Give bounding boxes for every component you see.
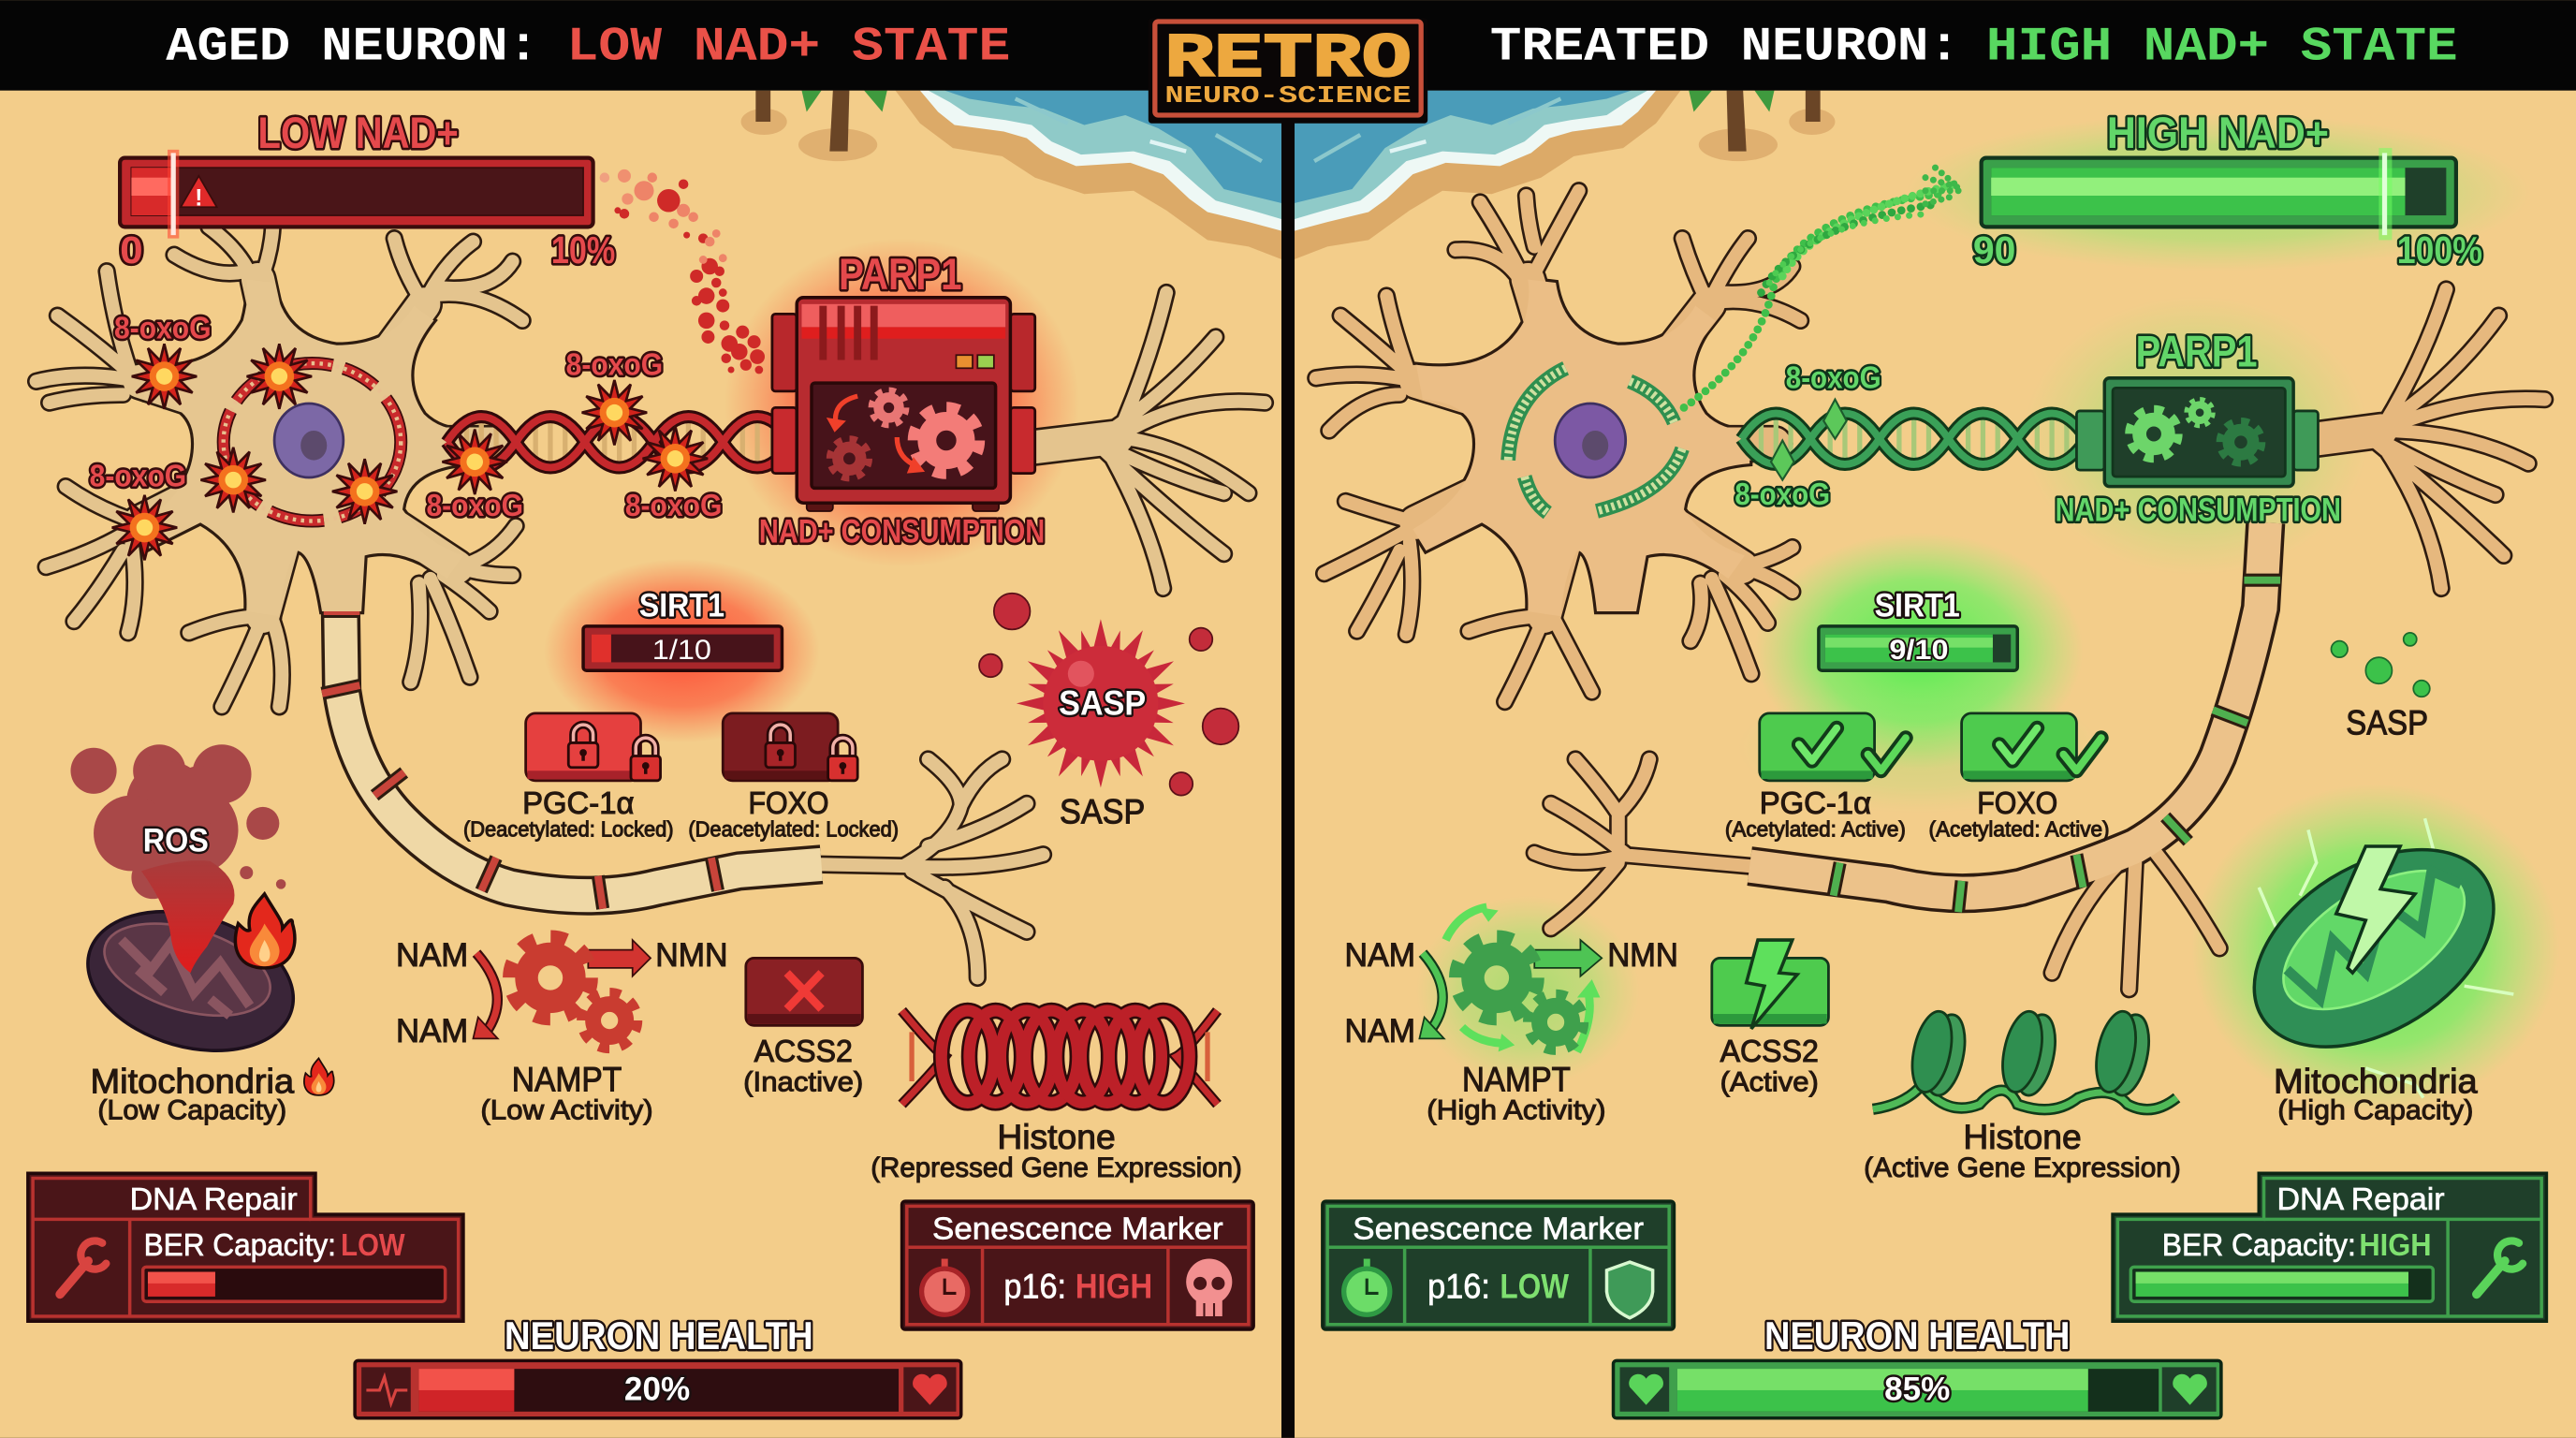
panel: DNA repair high: [2113, 1173, 2546, 1321]
logo: Retro Neuro-Science: RETRO: [1164, 24, 1412, 95]
label: PGC-1a acetylated: [1725, 786, 1906, 841]
panel: senescence marker low: p16:: [1427, 1268, 1490, 1306]
diagram: NAMPT low activity: NMN: [655, 937, 728, 974]
label: mitochondria high capacity: [2274, 1062, 2478, 1125]
glow: mitochondria green: [2191, 784, 2559, 1112]
label: NAD+ consumption: NAD+ CONSUMPTION: [2056, 492, 2341, 529]
icon: FOXO locked: [723, 713, 857, 781]
label: histone active: Histone: [1963, 1118, 2082, 1156]
panel: DNA repair high: BER Capacity:: [2162, 1228, 2356, 1263]
icon: ACSS2 inactive: [746, 958, 862, 1025]
icon: heartbeat: [366, 1377, 407, 1403]
glow: PARP1 red: [724, 239, 1079, 567]
panel: aged neuron: [28, 109, 1265, 1418]
label: FOXO acetylated: [1928, 786, 2110, 841]
gauge scale: 0 to 10%: 10%: [551, 228, 615, 271]
labels: 8-oxoG damage: 8-oxoG: [566, 347, 663, 382]
neuron: aged: [37, 227, 1265, 977]
label: FOXO deacetylated: [688, 786, 899, 841]
nucleus: [274, 404, 344, 477]
icon: skull: [1186, 1259, 1232, 1316]
label: neuron health: NEURON HEALTH: [505, 1313, 813, 1357]
icon: warning triangle: !: [195, 186, 202, 212]
glow: NAMPT green: [1416, 896, 1640, 1086]
DNA damage bursts: [112, 344, 708, 560]
DNA ring: intact, around nucleus: [1508, 368, 1682, 513]
icon: energized mitochondrion: [2219, 809, 2529, 1098]
gauge scale: 90 to 100%: [1973, 228, 2482, 271]
panel: senescence marker high: HIGH: [1076, 1268, 1152, 1306]
panel: DNA repair low: DNA Repair: [130, 1182, 298, 1217]
icon: clock: [1344, 1259, 1390, 1314]
glow: SIRT1 red: [544, 559, 820, 742]
label: NAD+ consumption: NAD+ CONSUMPTION: [759, 513, 1045, 550]
gauge: NAD+ high: [1982, 148, 2456, 240]
glow: checks soft green: [1738, 682, 2100, 814]
header bar: [0, 0, 2576, 91]
diagram: NAMPT high activity: NAMPT: [1462, 1061, 1571, 1099]
glow: PARP1 green: [2024, 296, 2369, 575]
panel: senescence marker low: Senescence Marker: [1353, 1211, 1644, 1246]
meter: SIRT1 9/10: [1819, 626, 2017, 670]
label: histone active: [1864, 1118, 2181, 1183]
panel: treated neuron: [1316, 109, 2559, 1418]
gauge: NAD+ low: [120, 150, 593, 239]
icon: PGC-1a locked: [526, 713, 661, 781]
label: mitochondria low capacity: (Low Capacity): [97, 1094, 286, 1125]
label: histone repressed: (Repressed Gene Expression): [871, 1152, 1242, 1183]
label: SIRT1: SIRT1: [639, 587, 724, 624]
nucleus: [1555, 404, 1626, 477]
icon: wrench: [60, 1240, 106, 1294]
panel: DNA repair low: [28, 1173, 463, 1321]
diagram: NAMPT high activity: NMN: [1607, 937, 1678, 974]
icon: heart right: [2173, 1374, 2207, 1405]
label: PGC-1a deacetylated: [463, 786, 674, 841]
title: aged neuron: LOW NAD+ STATE: [567, 21, 1010, 74]
panel: senescence marker high: p16:: [1003, 1268, 1066, 1306]
gauge scale: 90 to 100%: 90: [1973, 228, 2016, 271]
DNA helix: damaged: [446, 417, 792, 467]
labels: 8-oxoG damage: [90, 312, 722, 523]
diagram: NAMPT high activity: NAM: [1345, 937, 1415, 974]
diagram: NAMPT high activity: [1345, 907, 1678, 1125]
label: PGC-1a acetylated: PGC-1α: [1760, 786, 1871, 821]
panel: senescence marker low: [1323, 1201, 1674, 1329]
health bar: 85%: [1614, 1360, 2221, 1418]
panel: DNA repair low: LOW: [341, 1228, 405, 1263]
meter: SIRT1 9/10: 9/10: [1889, 635, 1949, 666]
label: PGC-1a deacetylated: PGC-1α: [522, 786, 634, 821]
logo: Retro Neuro-Science: NEURO-SCIENCE: [1164, 81, 1412, 110]
panel: DNA repair low: BER Capacity:: [144, 1228, 336, 1263]
labels: 8-oxoG minimal: 8-oxoG: [1734, 477, 1830, 512]
panel: DNA repair high: HIGH: [2359, 1228, 2432, 1263]
label: histone repressed: Histone: [997, 1118, 1116, 1156]
icon: FOXO active: [1962, 713, 2101, 781]
glow: SIRT1 green: [1754, 533, 2083, 770]
icon: clock: [922, 1259, 968, 1314]
icon: SASP small particles: [2331, 633, 2430, 697]
meter: SIRT1 1/10: 1/10: [652, 635, 711, 666]
icon: ROS smoke cloud: ROS: [143, 822, 209, 858]
panel: senescence marker low: LOW: [1500, 1268, 1569, 1306]
icon: SASP virus: [979, 594, 1238, 796]
label: PARP1: PARP1: [2136, 328, 2258, 377]
title: treated neuron: [1490, 21, 2458, 74]
labels: 8-oxoG damage: 8-oxoG: [625, 489, 722, 523]
diagram: NAMPT low activity: (Low Activity): [480, 1094, 653, 1125]
icon: wrench: [2477, 1240, 2523, 1294]
label: SASP: SASP: [2346, 704, 2428, 742]
icon: damaged mitochondrion: [71, 888, 310, 1073]
icon: heart: [913, 1374, 947, 1405]
neuron: treated: [1316, 191, 2545, 990]
label: FOXO deacetylated: FOXO: [748, 786, 828, 821]
title: aged neuron: [166, 21, 1010, 74]
icon: histone open nucleosomes: [1873, 1007, 2177, 1109]
label: PGC-1a acetylated: (Acetylated: Active): [1725, 816, 1906, 841]
meter: SIRT1 1/10: [583, 626, 782, 670]
panel: senescence marker high: Senescence Marker: [932, 1211, 1223, 1246]
label: SASP: SASP: [1060, 792, 1145, 830]
label: mitochondria high capacity: (High Capacity): [2277, 1094, 2473, 1125]
title: treated neuron: TREATED NEURON:: [1490, 21, 1960, 74]
diagram: NAMPT high activity: (High Activity): [1427, 1094, 1606, 1125]
icon: PGC-1a active: [1760, 713, 1906, 781]
glow: NAD+ gauge green: [1906, 113, 2530, 271]
health bar: 20%: [355, 1360, 961, 1418]
arrow: NAD+ particles rising to gauge: [1684, 168, 1965, 407]
label: FOXO acetylated: (Acetylated: Active): [1928, 816, 2110, 841]
label: ACSS2 active: (Active): [1720, 1067, 1819, 1098]
icon: histone repressed coil: [902, 1011, 1218, 1105]
label: neuron health: NEURON HEALTH: [1764, 1313, 2070, 1357]
icon: warning triangle: [181, 176, 217, 212]
panel: DNA repair high: DNA Repair: [2277, 1182, 2445, 1217]
label: PARP1: PARP1: [839, 250, 962, 300]
markers: repaired damage: [1771, 400, 1847, 480]
gauge scale: 0 to 10%: [120, 228, 615, 271]
icon: ROS smoke cloud: [70, 744, 285, 973]
label: FOXO acetylated: FOXO: [1977, 786, 2057, 821]
label: mitochondria high capacity: Mitochondria: [2274, 1062, 2478, 1100]
DNA ring: damaged, around nucleus: [224, 363, 401, 521]
heading: HIGH NAD+: HIGH NAD+: [2107, 109, 2329, 158]
label: histone active: (Active Gene Expression): [1864, 1152, 2181, 1183]
health bar: 20%: 20%: [624, 1371, 690, 1407]
label: SIRT1: SIRT1: [1875, 587, 1960, 624]
DNA helix: healthy: [1741, 414, 2086, 464]
gauge scale: 90 to 100%: 100%: [2397, 228, 2482, 271]
diagram: NAMPT low activity: NAMPT: [512, 1061, 622, 1099]
label: mitochondria low capacity: [91, 1058, 334, 1125]
labels: 8-oxoG minimal: [1734, 360, 1881, 512]
arrow: NAD+ particles flowing into PARP1: [600, 169, 765, 374]
label: ACSS2 inactive: (Inactive): [743, 1067, 863, 1098]
health bar: 85%: 85%: [1884, 1371, 1950, 1407]
gauge scale: 0 to 10%: 0: [120, 228, 143, 271]
label: ACSS2 inactive: [743, 1034, 863, 1098]
label: ACSS2 active: ACSS2: [1720, 1034, 1819, 1069]
diagram: NAMPT low activity: NAM: [396, 937, 468, 974]
labels: 8-oxoG damage: 8-oxoG: [426, 489, 523, 523]
center divider: [1281, 91, 1295, 1438]
diagram: NAMPT high activity: NAM: [1345, 1013, 1415, 1049]
icon: shield: [1606, 1262, 1653, 1318]
beach scene: left shore: [741, 91, 1292, 263]
panel: senescence marker high: [902, 1201, 1253, 1329]
label: histone repressed: [871, 1118, 1242, 1183]
diagram: NAMPT low activity: [396, 937, 728, 1125]
label: ACSS2 inactive: ACSS2: [754, 1034, 853, 1069]
machine: PARP1 overactive: [772, 298, 1035, 511]
title: treated neuron: HIGH NAD+ STATE: [1986, 21, 2458, 74]
beach scene: right shore: [1284, 91, 1835, 263]
icon: flame: [235, 894, 295, 968]
icon: ACSS2 active: [1712, 940, 1828, 1029]
heading: LOW NAD+: LOW NAD+: [258, 109, 459, 158]
diagram: NAMPT low activity: NAM: [396, 1013, 468, 1049]
icon: SASP virus: SASP: [1059, 684, 1146, 723]
icon: heart left: [1629, 1374, 1663, 1405]
logo: Retro Neuro-Science: [1149, 18, 1427, 124]
labels: 8-oxoG damage: 8-oxoG: [90, 460, 186, 494]
label: ACSS2 active: [1720, 1034, 1819, 1098]
label: mitochondria low capacity: Mitochondria: [91, 1062, 295, 1100]
label: FOXO deacetylated: (Deacetylated: Locked): [688, 816, 899, 841]
label: PGC-1a deacetylated: (Deacetylated: Locked): [463, 816, 674, 841]
machine: PARP1 calm: [2076, 378, 2318, 487]
title: aged neuron: AGED NEURON:: [166, 21, 539, 74]
labels: 8-oxoG damage: 8-oxoG: [114, 312, 212, 346]
labels: 8-oxoG minimal: 8-oxoG: [1786, 360, 1881, 395]
